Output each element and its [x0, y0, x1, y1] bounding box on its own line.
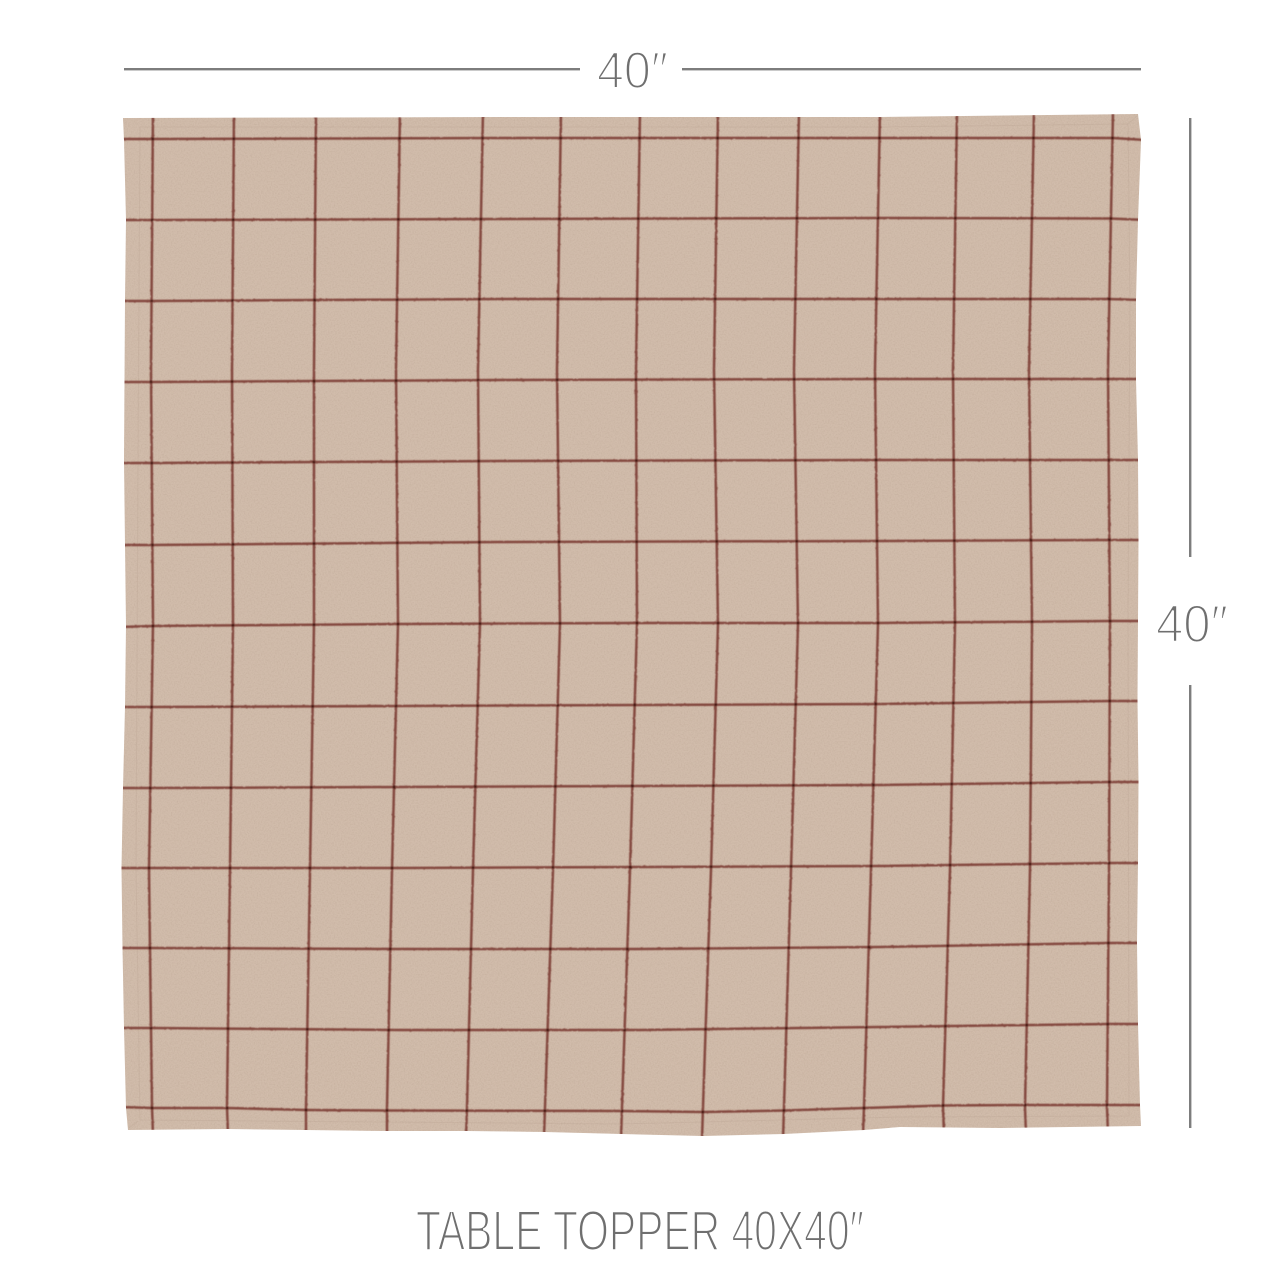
width label: 40″ [597, 42, 668, 100]
width dimension line [124, 68, 1141, 70]
window-pane grid lines [120, 112, 1145, 1140]
height label: 40″ [1156, 595, 1228, 654]
caption: TABLE TOPPER 40X40″ [416, 1199, 864, 1263]
height dimension line [1189, 118, 1191, 1128]
fabric base [110, 105, 1155, 1145]
hem stitching [129, 116, 1137, 1128]
table topper fabric [110, 105, 1155, 1145]
